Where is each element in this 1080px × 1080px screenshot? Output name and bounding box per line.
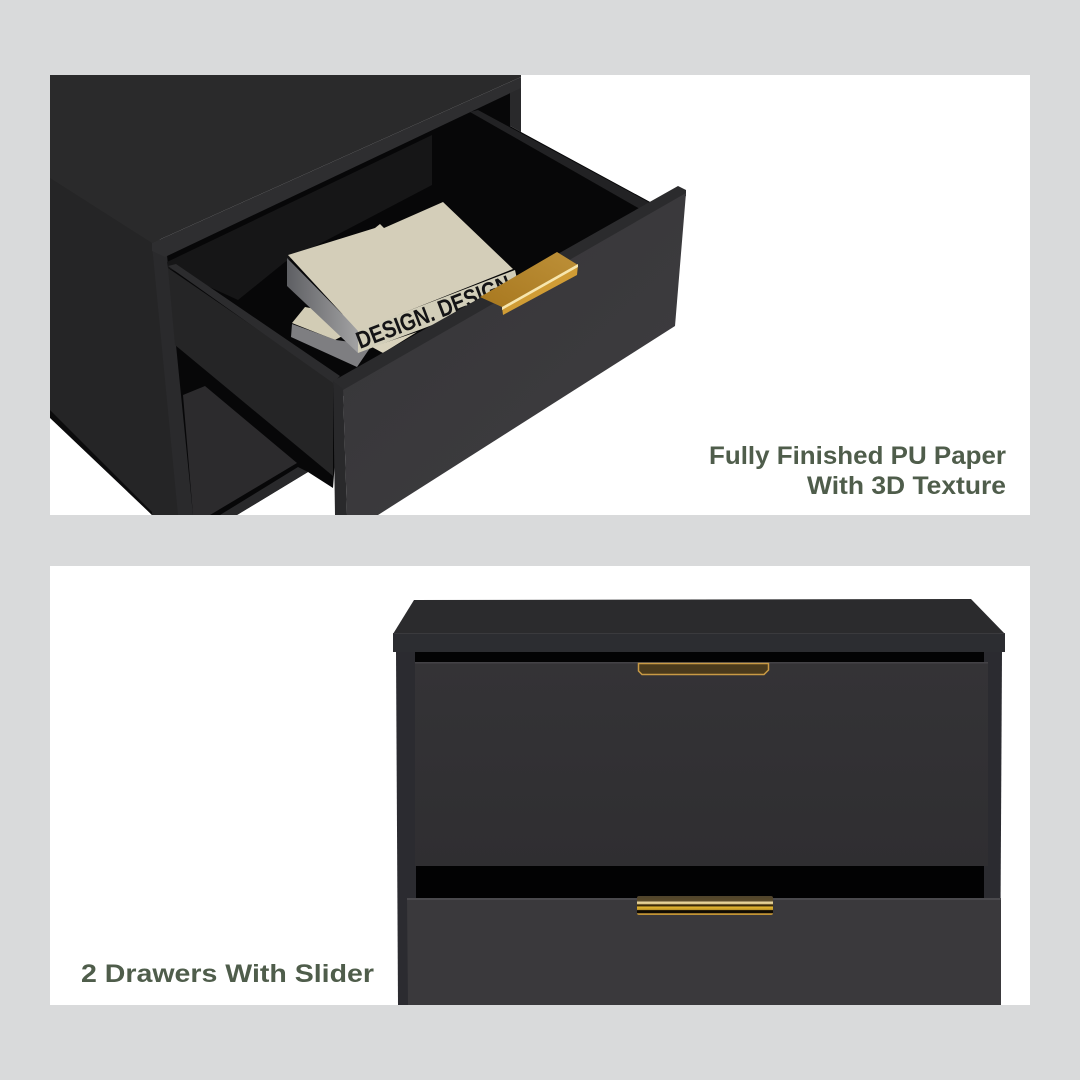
icon: upper gold handle bbox=[638, 664, 768, 674]
cabinet: black interior base bbox=[160, 84, 652, 515]
drawer: far side rim bbox=[470, 110, 650, 209]
caption: fully finished PU paper: With 3D Texture bbox=[807, 472, 1006, 500]
upper drawer front bbox=[415, 662, 988, 702]
panel: front view two drawers bbox=[50, 566, 1030, 1005]
cabinet: lower shelf bbox=[183, 386, 308, 515]
black gap above drawer bbox=[415, 652, 984, 663]
cabinet: side panel bbox=[50, 178, 178, 515]
cabinet: right frame stile bbox=[510, 88, 521, 132]
caption: fully finished PU paper bbox=[710, 446, 1006, 494]
cabinet top surface bbox=[393, 599, 1005, 634]
drawer interior back wall bbox=[167, 135, 432, 300]
panel: open drawer detail bbox=[50, 75, 1030, 515]
books in drawer bbox=[287, 202, 520, 367]
cabinet top edge bbox=[393, 633, 1005, 652]
panel background bbox=[50, 566, 1030, 1005]
lower book bbox=[292, 307, 349, 340]
cabinet: top front edge bbox=[152, 77, 521, 257]
upper book page edge bbox=[287, 258, 358, 353]
black gap between drawers bbox=[416, 866, 984, 899]
upper book cover bbox=[288, 202, 513, 331]
drawer: side rim bbox=[168, 264, 340, 383]
caption: fully finished PU paper: Fully Finished PU Paper bbox=[709, 442, 1006, 470]
lower drawer front bbox=[407, 898, 1001, 1005]
drawer: front panel bbox=[333, 186, 686, 515]
drawer: outer side bbox=[168, 268, 333, 476]
cabinet: top surface bbox=[50, 75, 521, 243]
cabinet: front frame stile bbox=[160, 255, 193, 515]
spine text: DESIGN. DESIGN bbox=[352, 270, 515, 354]
panel background bbox=[50, 75, 1030, 515]
caption: 2 drawers with slider: 2 Drawers With Slider bbox=[81, 960, 374, 988]
upper book spine bbox=[358, 270, 520, 353]
icon: gold drawer pull bbox=[480, 252, 578, 315]
cabinet carcass bbox=[396, 652, 1002, 1005]
icon: lower gold handle bbox=[637, 896, 773, 915]
